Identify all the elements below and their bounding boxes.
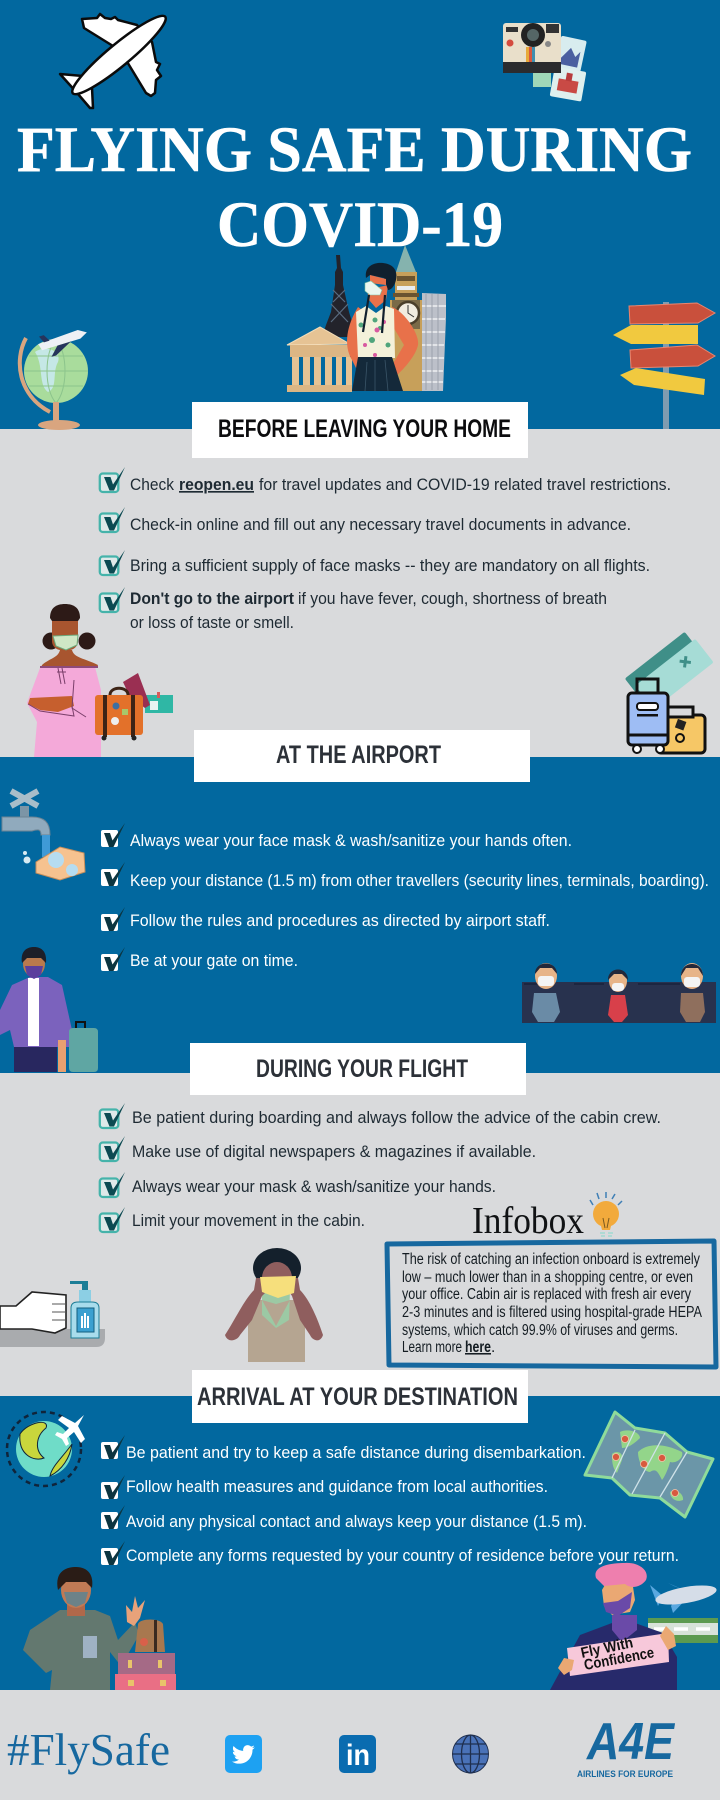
illustration: pink haired traveller with sign: Fly With <box>579 1634 635 1662</box>
item: follow the rules <box>101 907 550 931</box>
title: COVID-19 <box>217 189 503 261</box>
heading: arrival at your destination <box>192 1370 528 1423</box>
illustration: masked passengers on seats <box>522 963 716 1023</box>
item: be at your gate <box>101 947 298 971</box>
item: check reopen: Check <box>130 476 175 494</box>
item: don't go to the airport: if you have fever, cough, shortness of breath <box>298 590 607 608</box>
icon: linkedin: in <box>346 1739 370 1772</box>
hashtag: #FlySafe <box>7 1724 170 1775</box>
footer <box>7 1713 675 1779</box>
item: limit movement <box>100 1207 365 1232</box>
icon: airplane <box>60 8 172 108</box>
infobox: Learn more <box>402 1339 462 1356</box>
icon: twitter <box>225 1735 262 1773</box>
item: avoid physical contact: Avoid any physical contact and always keep your distance (1.5 m). <box>126 1513 587 1531</box>
illustration: signpost <box>613 302 715 429</box>
runway <box>648 1618 718 1643</box>
item: health measures: Follow health measures and guidance from local authorities. <box>126 1478 548 1496</box>
item: be patient during boarding <box>100 1103 661 1128</box>
item: always wear your mask <box>100 1172 496 1197</box>
heading: at the airport <box>194 730 530 782</box>
illustration: hand sanitizer <box>0 1281 105 1347</box>
item: don't go to the airport <box>100 587 607 632</box>
icon: linkedin <box>339 1735 376 1773</box>
item: be patient disembarkation: Be patient and try to keep a safe distance during disembarkation. <box>126 1444 586 1462</box>
item: complete forms: Complete any forms requested by your country of residence before your return. <box>126 1547 679 1565</box>
infobox: . <box>491 1339 495 1356</box>
item: be at your gate: Be at your gate on time. <box>130 952 298 970</box>
item: complete forms <box>101 1541 679 1565</box>
panel: arrival at your destination <box>7 1370 718 1690</box>
item: health measures <box>101 1475 548 1499</box>
illustration: pink haired traveller with sign: Confidence <box>583 1644 656 1674</box>
illustration: tap and washing hands <box>2 791 85 880</box>
item: avoid physical contact <box>101 1505 587 1531</box>
heading: before leaving your home <box>192 402 528 458</box>
illustration: man waving with luggage <box>23 1567 176 1690</box>
icon: instant camera and photos <box>503 23 587 102</box>
logo: airlines for europe: AIRLINES FOR EUROPE <box>577 1769 673 1779</box>
illustration: woman with landmarks <box>287 245 446 392</box>
illustration: luggage and tickets <box>625 629 714 753</box>
item: face masks <box>100 550 650 575</box>
illustration: woman adjusting mask <box>225 1248 323 1362</box>
illustration: globe with plane <box>20 323 91 430</box>
item: check reopen: for travel updates and COVID-19 related travel restrictions. <box>259 476 671 494</box>
small plane <box>650 1582 718 1613</box>
illustration: world map <box>585 1412 713 1517</box>
infobox: here <box>465 1339 491 1356</box>
heading: during your flight: DURING YOUR FLIGHT <box>256 1055 468 1083</box>
item: limit movement: Limit your movement in the cabin. <box>132 1212 365 1230</box>
item: keep distance <box>101 862 709 890</box>
item: don't go to the airport: Don't go to the airport <box>130 590 294 608</box>
illustration: man in purple jacket <box>0 947 98 1072</box>
title: FLYING SAFE DURING <box>17 114 692 186</box>
panel: before leaving your home <box>27 402 714 757</box>
item: wear face mask: Always wear your face mask & wash/sanitize your hands often. <box>130 832 572 850</box>
icon: light bulb <box>590 1192 622 1236</box>
heading: during your flight <box>190 1043 526 1095</box>
illustration: earth with plane <box>7 1412 85 1486</box>
item: be patient disembarkation <box>101 1435 586 1462</box>
item: always wear your mask: Always wear your mask & wash/sanitize your hands. <box>132 1178 496 1196</box>
item: check reopen <box>100 467 671 494</box>
title <box>17 114 692 261</box>
illustration: pink haired traveller with sign <box>550 1563 718 1690</box>
panel: during your flight <box>0 1043 716 1367</box>
item: face masks: Bring a sufficient supply of face masks -- they are mandatory on all flights. <box>130 557 650 575</box>
item: check reopen: reopen.eu <box>179 476 254 494</box>
heading: before leaving your home: BEFORE LEAVING YOUR HOME <box>218 415 511 443</box>
item: check-in online: Check-in online and fill out any necessary travel documents in advance. <box>130 516 631 534</box>
heading: at the airport: AT THE AIRPORT <box>276 741 441 769</box>
item: digital newspapers: Make use of digital newspapers & magazines if available. <box>132 1143 536 1161</box>
panel: at the airport <box>0 730 716 1072</box>
item: wear face mask <box>101 823 572 850</box>
illustration: woman in pink with suitcase <box>27 604 173 757</box>
heading: arrival at your destination: ARRIVAL AT YOUR DESTINATION <box>197 1383 518 1411</box>
item: don't go to the airport: or loss of taste or smell. <box>130 614 294 632</box>
infobox <box>387 1241 716 1367</box>
icon: globe <box>452 1735 489 1773</box>
infobox heading: Infobox <box>472 1200 584 1242</box>
logo: airlines for europe: A4E <box>585 1713 675 1771</box>
item: be patient during boarding: Be patient during boarding and always follow the advice of the cabin crew. <box>132 1109 661 1127</box>
item: follow the rules: Follow the rules and procedures as directed by airport staff. <box>130 912 550 930</box>
item: check-in online <box>100 507 631 534</box>
item: digital newspapers <box>100 1136 536 1161</box>
